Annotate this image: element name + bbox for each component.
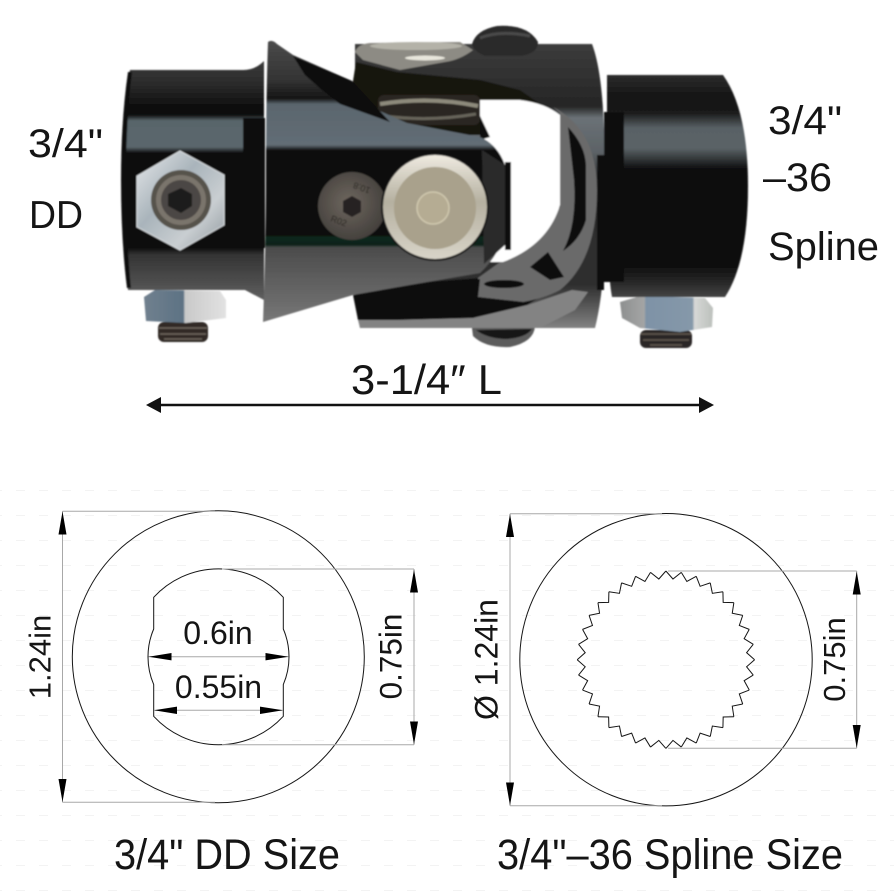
faint background dashes [0,490,894,894]
left collar rim [121,72,132,288]
yoke end black sliver [505,162,511,250]
socket bolt: 10:8 [352,180,372,196]
label: right shaft size: Spline [768,225,879,269]
bore height dimension [222,569,418,745]
small oval recess [484,280,524,288]
bolt: bottom head [472,326,535,347]
right yoke [355,44,604,328]
black inside of bottom arm [353,278,540,320]
width across flats dimension [154,669,283,714]
nut: right clamp bolt [620,296,713,348]
label: left shaft size: 3/4" [28,122,103,166]
outer circle [72,511,364,803]
left collar dark band [243,118,265,248]
label: right shaft size [763,99,879,269]
label: right shaft size: 3/4" [768,99,842,143]
right collar dark seam [604,112,624,282]
black wedge over yoke [293,56,390,122]
spline diameter dimension: 0.75in [817,617,852,702]
label: right shaft size: –36 [763,156,832,200]
silver top cap [355,42,473,70]
spider threads top [378,95,480,125]
spline diameter dimension [668,571,861,748]
caption: DD size: 3/4" DD Size [114,831,340,879]
36-tooth spline hole [576,570,756,750]
bottom edge of left yoke [356,279,523,320]
curved inner arm face [478,107,597,302]
width across arcs dimension [148,615,288,660]
right yoke dark edge [597,155,604,290]
length label: 3-1/4″ L [351,356,502,403]
pin cap [381,153,489,261]
spider black corner [480,116,490,140]
black streak on arm [563,127,586,251]
left collar [122,61,264,300]
outer diameter dimension: 1.24in [23,615,58,699]
black inside of top arm [350,62,553,135]
width across arcs dimension: 0.6in [183,615,253,651]
silver lower rim [358,290,588,328]
right collar [607,75,748,297]
left yoke [263,41,510,322]
length arrow [146,397,714,413]
black triangle on arm [530,252,564,280]
diagram: spline bore [468,514,861,806]
label: left shaft size: DD [29,194,83,237]
bore height dimension: 0.75in [373,614,409,699]
hex nut: front [137,151,224,250]
double-D hole [148,569,289,745]
socket bolt [318,172,386,240]
nut: left clamp bolt [144,290,226,342]
white window in yoke [480,100,560,262]
bolt: top head [472,26,538,56]
label: left shaft size [28,122,103,237]
outer circle [520,514,812,806]
caption: spline size: 3/4"–36 Spline Size [497,831,843,879]
diagram: DD bore [23,511,418,803]
yoke end shading [482,150,505,264]
outer diameter dimension [23,511,215,802]
socket bolt: R02 [329,213,348,229]
outer diameter dimension [468,514,662,806]
photo: universal joint [121,26,748,348]
outer diameter dimension: Ø 1.24in [468,599,504,720]
width across flats dimension: 0.55in [175,669,262,705]
